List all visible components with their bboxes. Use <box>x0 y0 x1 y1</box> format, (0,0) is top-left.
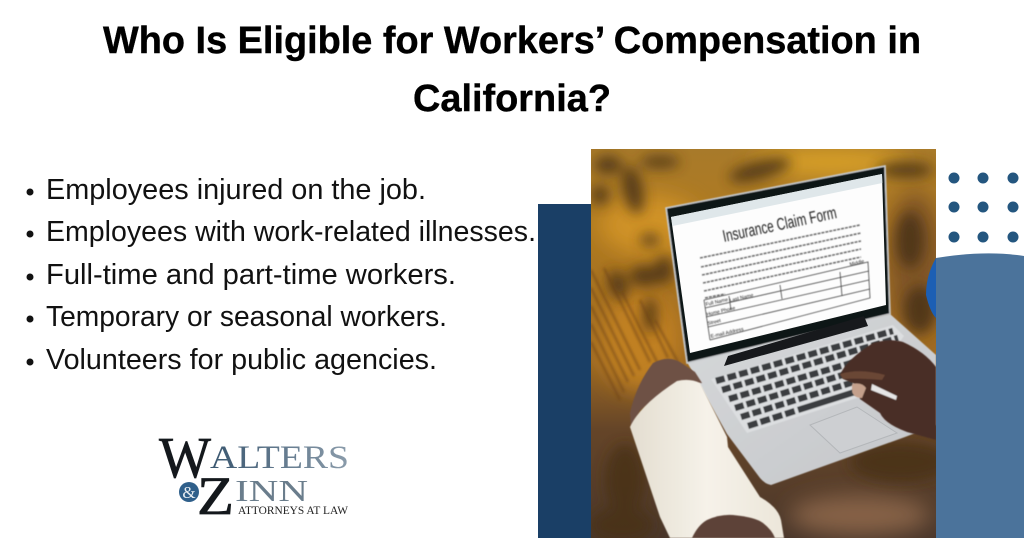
logo: Walters & Zinn: Z <box>197 466 234 526</box>
forearm <box>692 515 775 538</box>
logo: Walters & Zinn: & <box>182 483 196 502</box>
logo: Walters & Zinn: W <box>159 425 211 490</box>
title: Who Is Eligible for Workers’ Compensation in <box>103 20 921 62</box>
bullet list: eligible workers <box>26 174 536 376</box>
bullet: volunteers: Volunteers for public agencies. <box>46 344 437 376</box>
right hand <box>840 340 936 440</box>
bullet: temporary or seasonal: Temporary or seasonal workers. <box>46 301 447 333</box>
claim form: Insurance Claim Form <box>721 203 838 246</box>
laptop screen <box>666 166 890 366</box>
panel: dark blue block <box>538 204 591 538</box>
wood grain <box>591 268 679 398</box>
title: California? <box>413 78 611 120</box>
claim form: E-mail Address <box>710 326 745 340</box>
claim form: Home Phone <box>706 305 736 318</box>
logo: Walters & Zinn: ATTORNEYS AT LAW <box>238 503 349 517</box>
arm cast <box>630 380 784 538</box>
title <box>103 20 921 120</box>
bullet: full-time and part-time: Full-time and part-time workers. <box>46 259 456 291</box>
logo: Walters & Zinn: ALTERS <box>210 440 349 476</box>
left hand <box>630 359 702 428</box>
claim form <box>700 203 870 340</box>
laptop base <box>687 314 936 485</box>
bullet: employees injured: Employees injured on the job. <box>46 174 426 206</box>
claim form: Full Name <box>705 297 729 308</box>
trackpad <box>810 407 897 453</box>
logo: Walters & Zinn <box>159 425 349 526</box>
keyboard <box>711 325 904 433</box>
claim form: Last Name <box>729 293 754 304</box>
claim form: Street <box>707 318 722 327</box>
icon: blue object beside photo <box>926 258 936 318</box>
bullet: work-related illnesses: Employees with work-related illnesses. <box>46 216 536 248</box>
photo: injured worker filling in claim form on laptop <box>590 148 950 538</box>
logo: Walters & Zinn: INN <box>235 473 308 508</box>
dot grid <box>948 172 1018 242</box>
panel: right blue block <box>936 253 1024 538</box>
wooden desk <box>590 148 950 538</box>
claim form: Middle <box>849 259 865 268</box>
